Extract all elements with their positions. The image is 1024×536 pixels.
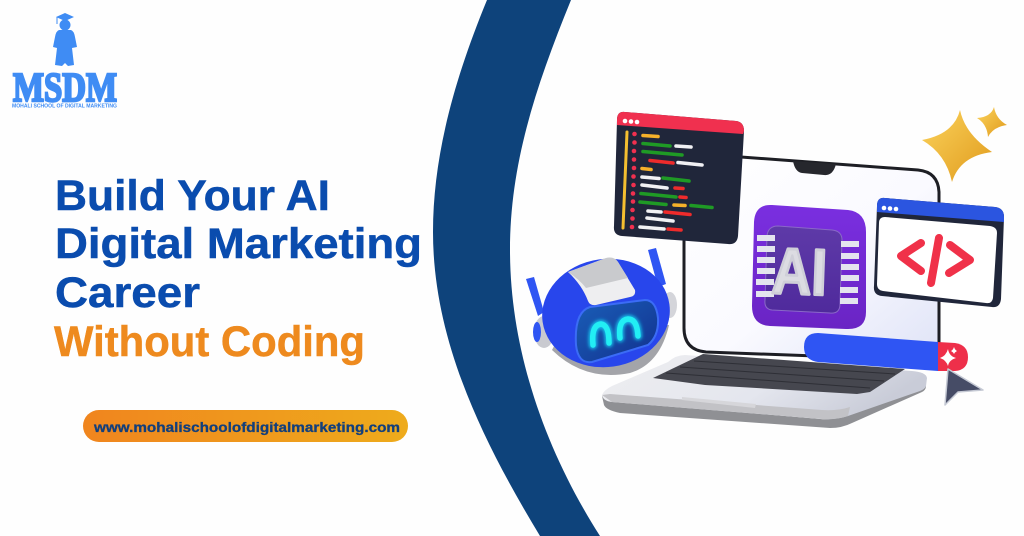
- robot eyes: [593, 319, 638, 345]
- prompt bar blue: [804, 333, 938, 371]
- decorative navy crescent: [433, 0, 600, 536]
- code window frame: [874, 198, 1004, 307]
- robot right ear: [663, 292, 677, 318]
- heading line 1: Build Your AI: [55, 172, 330, 220]
- AI chip icon: [752, 205, 866, 329]
- website pill: [83, 410, 408, 442]
- editor line markers: [630, 132, 637, 229]
- laptop camera notch: [793, 161, 836, 175]
- robot right antenna: [648, 248, 666, 287]
- code tag window: [874, 198, 1004, 307]
- robot skull shadow: [552, 325, 669, 375]
- editor code lines: [640, 136, 712, 230]
- heading line 4 orange: Without Coding: [54, 318, 365, 366]
- code window panel: [877, 217, 997, 303]
- heading line 2: Digital Marketing: [55, 220, 422, 268]
- website url: www.mohalischoolofdigitalmarketing.com: [93, 419, 400, 435]
- robot visor: [576, 300, 658, 362]
- robot top plate: [568, 258, 635, 305]
- editor body: [614, 112, 744, 244]
- laptop screen: [684, 154, 939, 360]
- code editor window: [614, 112, 744, 244]
- large star: [922, 110, 992, 182]
- chip pins: [756, 235, 859, 304]
- editor window dots: [623, 119, 639, 124]
- logo wordmark: MSDM: [13, 64, 117, 110]
- code symbol: [901, 238, 970, 283]
- prompt bar red end: [938, 342, 968, 371]
- logo graduate figure: [53, 13, 77, 66]
- robot head: [526, 248, 677, 375]
- cursor arrow: [945, 369, 983, 405]
- prompt bar sparkle: [940, 347, 957, 366]
- small star: [977, 107, 1007, 137]
- code window dots: [882, 206, 898, 211]
- laptop trackpad edge: [682, 397, 756, 408]
- laptop keyboard: [653, 354, 905, 394]
- AI prompt bar: [804, 333, 968, 371]
- chip glass panel: [765, 226, 842, 313]
- editor title bar: [617, 112, 744, 134]
- chip AI label: AI: [771, 234, 828, 309]
- laptop illustration: [602, 154, 939, 428]
- robot left antenna: [526, 277, 544, 316]
- robot skull: [535, 251, 677, 375]
- heading: [54, 172, 422, 366]
- chip body: [752, 205, 866, 329]
- heading line 3: Career: [55, 269, 200, 317]
- logo tagline: MOHALI SCHOOL OF DIGITAL MARKETING: [12, 104, 117, 110]
- robot left ear: [533, 316, 554, 348]
- laptop base: [602, 355, 927, 428]
- code window title bar: [877, 198, 1004, 222]
- logo: MSDM: [12, 13, 117, 110]
- editor gutter bar: [623, 132, 627, 228]
- sparkle stars: [922, 107, 1007, 182]
- robot top plate shade: [568, 258, 628, 288]
